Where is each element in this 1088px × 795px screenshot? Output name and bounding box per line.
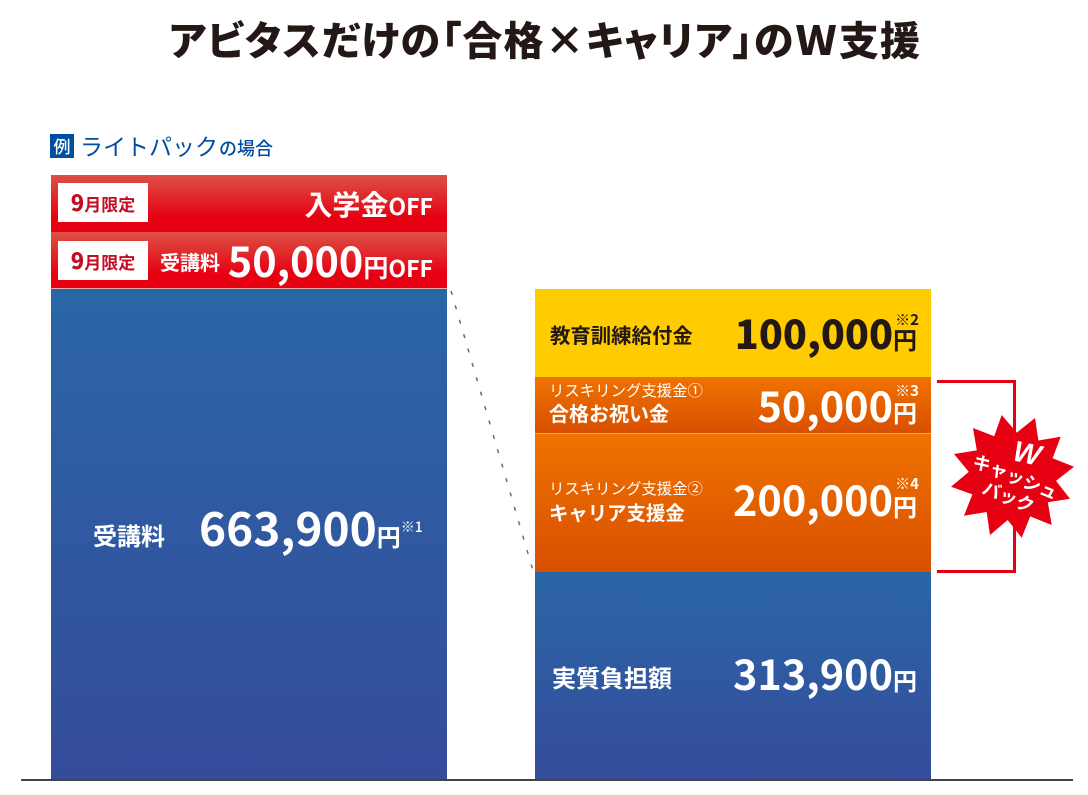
connector: dashed line xyxy=(450,290,533,568)
text: tuition amount: 663,900円※1 xyxy=(199,494,423,560)
amount: 200,000円 xyxy=(733,468,917,528)
label: small: リスキリング支援金② xyxy=(549,477,703,499)
footnote mark: ※2 xyxy=(895,309,919,330)
example badge xyxy=(50,134,74,158)
text: tuition label: 受講料 xyxy=(93,517,165,552)
tag: September only xyxy=(58,241,148,280)
footnote mark: ※4 xyxy=(895,473,919,494)
segment: education training benefit xyxy=(535,289,931,377)
badge: W cashback burst: W xyxy=(1010,436,1046,473)
amount: 313,900円 xyxy=(733,642,917,702)
example badge: 例 xyxy=(54,133,70,158)
label: small: リスキリング支援金① xyxy=(549,379,703,401)
title: アビタスだけの「合格×キャリア」のＷ支援 xyxy=(169,9,921,67)
tag: September only: 9月限定 xyxy=(71,244,135,276)
row: enrollment fee off xyxy=(51,175,447,232)
text: tuition label: 受講料 xyxy=(160,247,220,276)
baseline xyxy=(21,779,1073,781)
text: enrollment fee OFF: 入学金OFF xyxy=(304,184,433,224)
amount: 100,000円 xyxy=(735,304,917,361)
segment: reskilling support 2 xyxy=(535,433,931,572)
badge: W cashback burst xyxy=(951,415,1074,538)
bracket: W cashback xyxy=(937,380,1016,573)
row: tuition discount xyxy=(51,232,447,288)
footnote mark: ※3 xyxy=(895,380,919,401)
example label: light pack xyxy=(50,128,273,162)
badge: W cashback burst: バック xyxy=(979,474,1039,519)
tag: September only: 9月限定 xyxy=(71,186,135,218)
segment: actual cost xyxy=(535,572,931,780)
label: 実質負担額 xyxy=(552,659,672,694)
text: 50,000 yen OFF: 50,000円OFF xyxy=(228,229,433,289)
amount: 50,000円 xyxy=(757,374,917,434)
left column: tuition before support xyxy=(51,175,447,779)
label: main: 合格お祝い金 xyxy=(549,398,669,427)
segment: reskilling support 1 xyxy=(535,377,931,433)
tag: September only xyxy=(58,183,148,222)
label: 教育訓練給付金 xyxy=(550,319,693,349)
right column: breakdown xyxy=(535,289,931,779)
bar: tuition xyxy=(51,288,447,780)
example caption: ライトパックの場合 xyxy=(80,128,273,162)
label: main: キャリア支援金 xyxy=(549,497,685,526)
badge: W cashback burst: キャッシュ xyxy=(969,448,1062,505)
